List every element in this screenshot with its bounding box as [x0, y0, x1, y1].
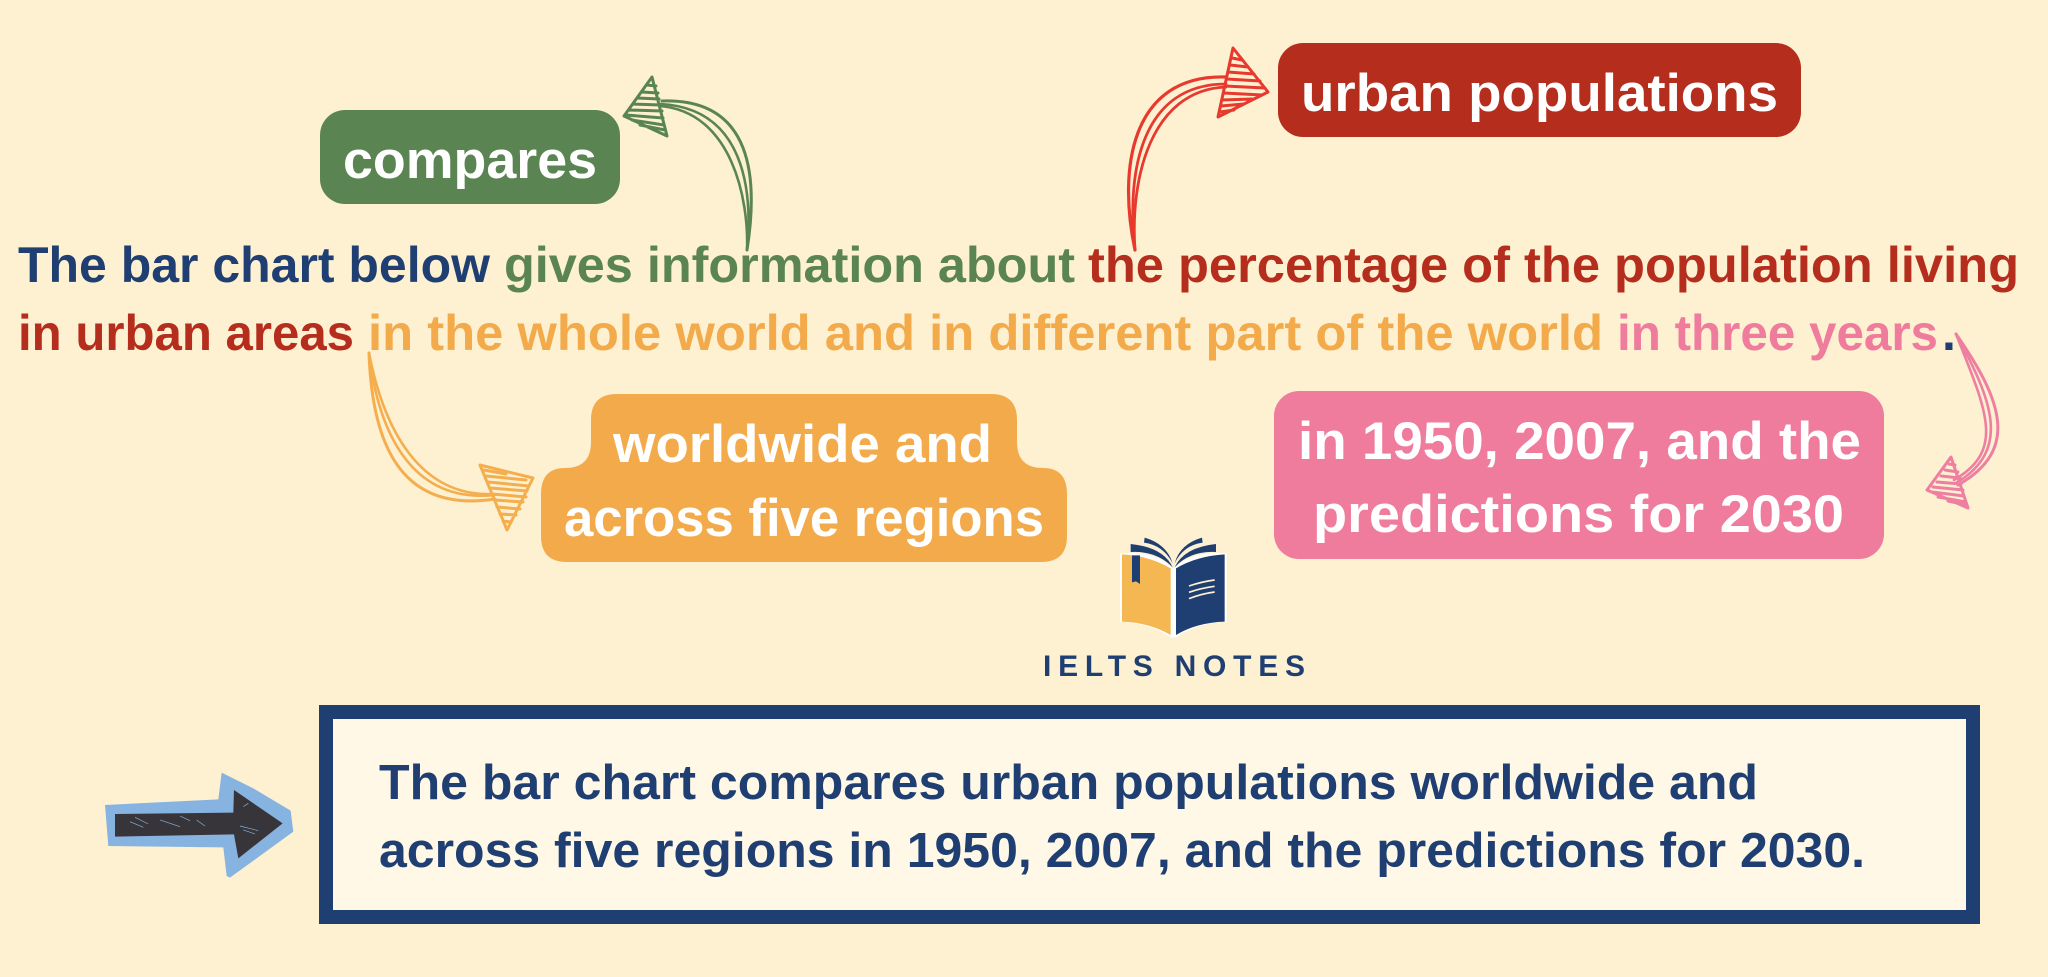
icon: hand-drawn right arrow	[105, 773, 293, 878]
callout: worldwide and across five regions: worldwide and	[612, 415, 992, 474]
callout: in 1950, 2007, and the predictions for 2030: in 1950, 2007, and the	[1298, 412, 1861, 471]
arrow: red from sentence to urban populations	[1129, 48, 1268, 250]
callout: compares: compares	[343, 131, 597, 190]
sentence: question statement, colour coded: gives information about	[504, 237, 1075, 293]
sentence: question statement, colour coded: in urban areas	[18, 305, 354, 361]
arrow: pink from sentence to dates	[1927, 334, 1998, 508]
logo wordmark: IELTS NOTES	[1043, 650, 1305, 683]
icon: open book	[1120, 538, 1227, 637]
logo: IELTS Notes	[1043, 538, 1305, 683]
panel: paraphrased answer	[326, 712, 1973, 917]
callout: worldwide and across five regions: across five regions	[564, 489, 1044, 548]
arrow: orange from sentence to worldwide	[369, 353, 533, 530]
sentence: question statement, colour coded: the percentage of the population living	[1088, 237, 2019, 293]
callout: in 1950, 2007, and the predictions for 2030	[1274, 391, 1884, 559]
callout: urban populations: urban populations	[1301, 64, 1778, 123]
answer text: The bar chart compares urban populations worldwide and	[379, 756, 1758, 810]
sentence: question statement, colour coded: in three years	[1617, 305, 1938, 361]
callout: compares	[320, 110, 620, 204]
sentence: question statement, colour coded: The bar chart below	[18, 237, 490, 293]
answer text	[379, 756, 1865, 878]
arrow: green from sentence to compares	[624, 77, 751, 250]
callout: in 1950, 2007, and the predictions for 2030: predictions for 2030	[1313, 485, 1844, 544]
sentence: question statement, colour coded: in the whole world and in different part of the world	[368, 305, 1603, 361]
answer text: across five regions in 1950, 2007, and the predictions for 2030.	[379, 824, 1865, 878]
sentence: question statement, colour coded: .	[1942, 305, 1956, 361]
callout: worldwide and across five regions	[541, 394, 1067, 562]
callout: urban populations	[1278, 43, 1801, 137]
sentence: question statement, colour coded	[18, 237, 2019, 361]
